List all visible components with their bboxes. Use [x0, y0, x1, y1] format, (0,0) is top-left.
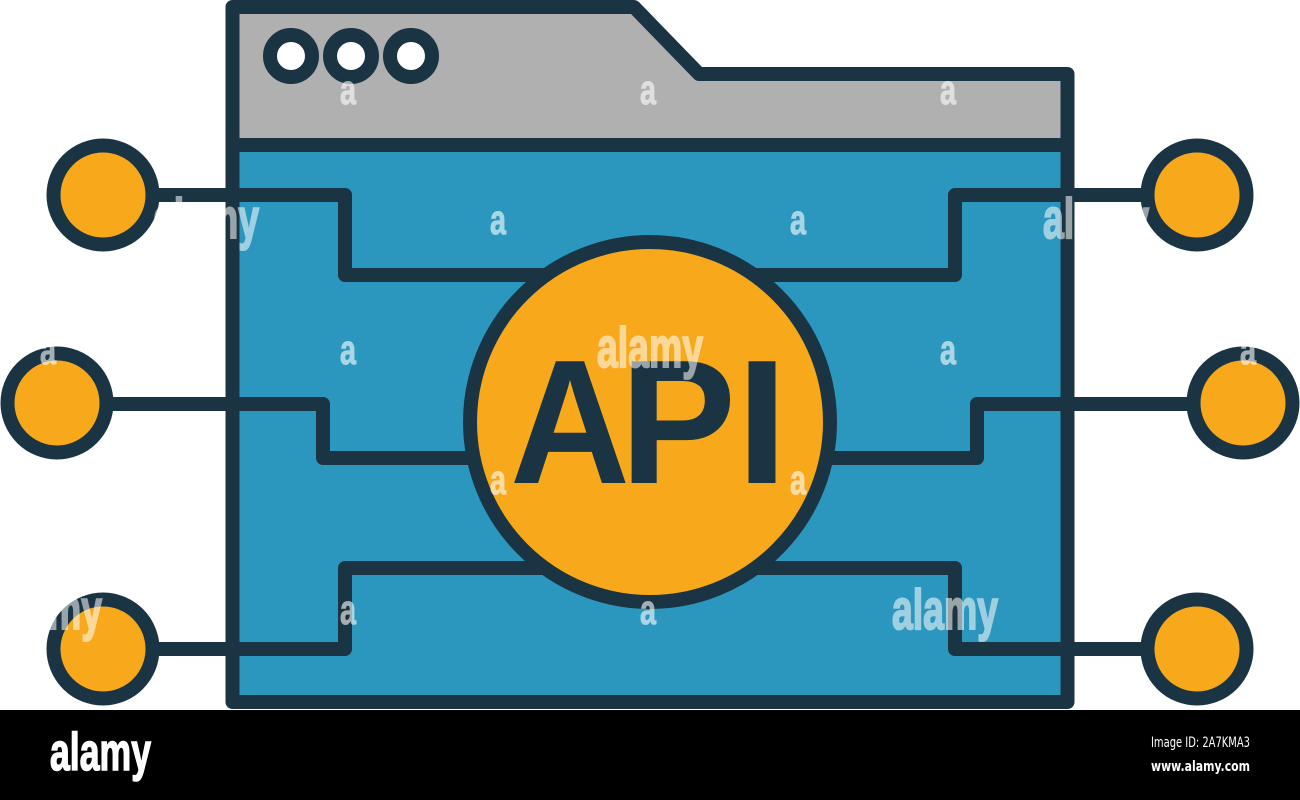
small watermark marks: a [790, 456, 806, 503]
small watermark marks: a [790, 196, 806, 243]
API label: P [620, 323, 736, 521]
small watermark marks: a [340, 326, 356, 373]
small watermark marks: a [640, 586, 656, 633]
small watermark marks: a [940, 326, 956, 373]
website: www.alamy.com [1151, 759, 1250, 775]
watermark text: alamy [1043, 187, 1149, 251]
image ID: Image ID: 2A7KMA3 [1151, 735, 1250, 751]
small watermark marks: a [640, 66, 656, 113]
icon: left nodes [8, 146, 152, 698]
API label: A [510, 323, 630, 521]
panel: browser window body [232, 7, 1068, 702]
panel: folder tab header [232, 7, 1068, 145]
central API circle [470, 242, 830, 602]
icon: right nodes [1148, 146, 1292, 698]
small watermark marks [40, 66, 1256, 633]
small watermark marks: a [340, 66, 356, 113]
watermark text [0, 187, 1149, 642]
small watermark marks: a [340, 586, 356, 633]
small watermark marks: a [40, 326, 56, 373]
API label [510, 323, 788, 521]
small watermark marks: a [940, 66, 956, 113]
watermark text: alamy [153, 187, 259, 251]
footer bar [0, 710, 1300, 800]
small watermark marks: a [490, 456, 506, 503]
watermark text: alamy [0, 578, 102, 642]
small watermark marks: a [490, 196, 506, 243]
watermark text: alamy [597, 316, 703, 380]
watermark text: alamy [892, 578, 998, 642]
API label: I [736, 323, 788, 521]
circuit connector lines [108, 195, 1192, 649]
icon: three window dots [270, 35, 432, 77]
small watermark marks: a [1240, 326, 1256, 373]
footer logo: alamy [50, 723, 151, 782]
